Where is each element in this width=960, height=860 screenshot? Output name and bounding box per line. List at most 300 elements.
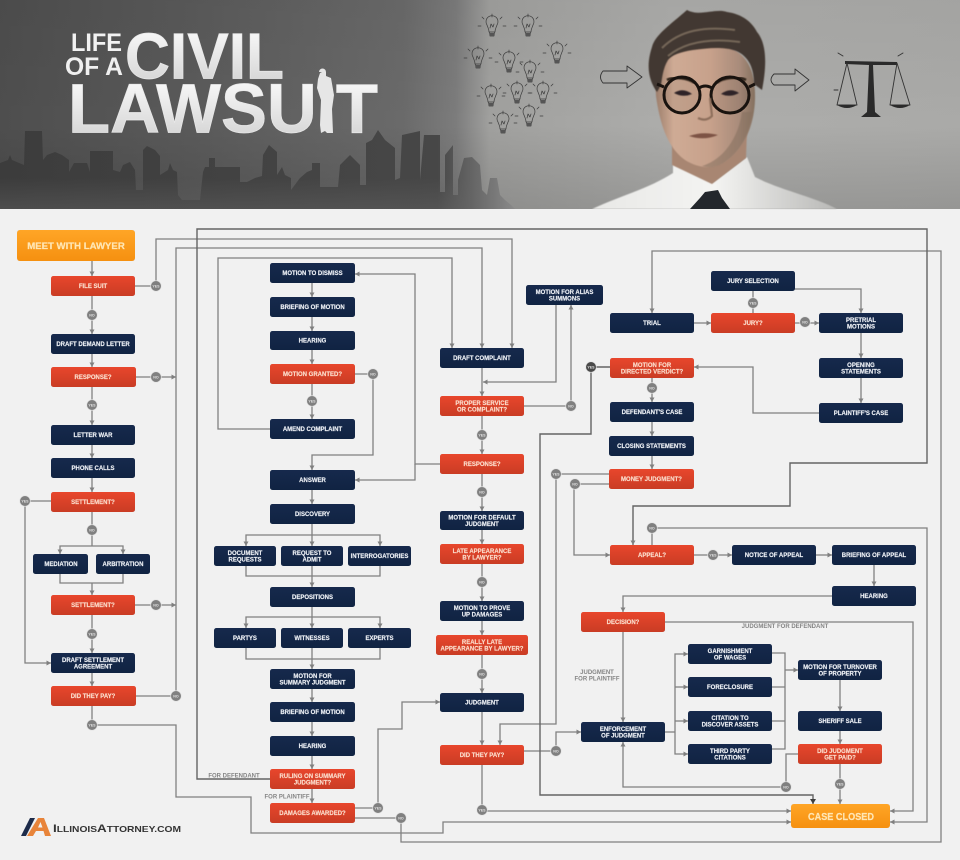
box: letter war: LETTER WAR: [74, 433, 113, 439]
box: citation to discover assets: CITATION TO: [711, 716, 749, 722]
box: damages awarded: DAMAGES AWARDED?: [279, 811, 346, 817]
arrow: appeal no to case closed: [652, 528, 927, 822]
box: did they pay: [51, 686, 136, 706]
badge: jury no: NO: [802, 320, 808, 324]
arrow: jury yes to jury selection: [752, 291, 754, 313]
box: motion for default judgment: MOTION FOR DEFAULT: [448, 515, 516, 521]
arrow: briefing to hearing: [311, 317, 313, 331]
arrow: draft demand letter to response: [91, 354, 93, 367]
box: opening statements: OPENING: [847, 363, 875, 369]
box: partys: PARTYS: [233, 636, 257, 642]
label: for plaintiff: FOR PLAINTIFF: [264, 794, 310, 800]
connectors: appeal and enforcement: [623, 528, 927, 822]
badge: damages no: [396, 813, 406, 823]
box: partys: [214, 628, 276, 648]
box: response: [51, 367, 136, 387]
box: response 2: [440, 454, 524, 474]
arrow: did judgment get paid to case closed: [839, 764, 841, 804]
badge: directed verdict yes: YES: [587, 365, 595, 369]
box: answer: ANSWER: [299, 478, 326, 484]
box: briefing of motion 2: BRIEFING OF MOTION: [280, 710, 345, 716]
icon: arrow from bulbs to man: [600, 66, 642, 88]
arrow: money judgment no to appeal: [574, 484, 610, 555]
arrow: did they pay yes to case closed: [482, 765, 791, 811]
arrow: closing to money judgment: [651, 456, 653, 469]
arrow: response to default: [481, 474, 483, 511]
box: draft demand letter: DRAFT DEMAND LETTER: [56, 342, 130, 348]
badge: directed verdict no: NO: [649, 386, 655, 390]
icons: light bulbs: [464, 14, 571, 133]
arrow: did they pay yes to case closed: [92, 725, 791, 833]
arrow: response to motion to dismiss: [355, 274, 440, 464]
box: draft demand letter: [51, 334, 135, 354]
box: citation to discover assets: DISCOVER ASSETS: [702, 722, 758, 728]
box: did they pay 2: DID THEY PAY?: [460, 753, 505, 759]
badge: directed verdict no: [647, 383, 657, 393]
badge: judgment paid yes: YES: [836, 782, 844, 786]
badge: late appearance no: [477, 577, 487, 587]
arrow: hearing to motion granted: [311, 350, 313, 364]
connector: enforcement to options trunk: [665, 731, 675, 733]
arrow: response to letter war: [91, 387, 93, 425]
badge: appeal yes: YES: [709, 553, 717, 557]
box: pretrial motions: [819, 313, 903, 333]
arrow: split to mediation: [60, 546, 92, 554]
arrow: merge to motion for summary judgment: [311, 648, 313, 669]
arrow: to foreclosure: [675, 686, 688, 688]
icon: bulb 6: [543, 41, 571, 63]
box: decision: DECISION?: [607, 620, 640, 626]
box: motion for summary judgment: [270, 669, 355, 689]
box: request to admit: [281, 546, 343, 566]
connector: discovery merge: [246, 566, 380, 576]
arrow: draft complaint to proper service: [481, 368, 483, 396]
box: hearing 3: [832, 586, 916, 606]
badge: did they pay no: NO: [173, 694, 179, 698]
badge: response 2 no: [477, 487, 487, 497]
badge: settlement 2 yes: [87, 629, 97, 639]
box: amend complaint: [270, 419, 355, 439]
badge: did they pay no: [171, 691, 181, 701]
arrow: summary judgment to briefing: [311, 689, 313, 702]
badge: settlement no: [87, 525, 97, 535]
badge: judgment paid yes: [835, 779, 845, 789]
arrow: discovery to interrogatories: [312, 535, 380, 546]
icon: bulb 2: [514, 14, 542, 36]
icon: scales of justice: [834, 53, 910, 117]
photo: man with glasses: [592, 10, 837, 209]
arrow: depositions to witnesses: [311, 607, 313, 628]
icon: arrow from man to scales: [771, 69, 809, 91]
arrow: jury selection to pretrial: [795, 289, 861, 313]
arrow: proper service no to alias summons: [524, 305, 571, 406]
box: interrogatories: [348, 546, 411, 566]
arrow: depositions to partys: [246, 617, 312, 628]
logo mark A: [27, 818, 51, 836]
labels: [208, 624, 829, 800]
box: ruling on summary judgment: [270, 769, 355, 789]
box: hearing 2: [270, 736, 355, 756]
arrow: discovery to document requests: [246, 535, 312, 546]
box: motion for alias summons: [526, 285, 603, 305]
glasses: [664, 77, 749, 113]
box: foreclosure: [688, 677, 772, 697]
box: discovery: [270, 504, 355, 524]
box: depositions: [270, 587, 355, 607]
title: Civil: CIVIL: [125, 20, 284, 92]
mouth: [689, 133, 718, 138]
badge: appeal no: [647, 523, 657, 533]
box: file suit: [51, 276, 135, 296]
title: of a: OF A: [65, 53, 123, 81]
box: motion for turnover of property: OF PROPERTY: [818, 672, 862, 678]
badges: [20, 281, 845, 823]
box: motion for default judgment: [440, 511, 524, 530]
arrow: decision to case closed: [665, 622, 913, 811]
badge: settlement yes: YES: [21, 499, 29, 503]
badge: motion granted no: [368, 369, 378, 379]
arrow: defendant's case to closing: [651, 422, 653, 436]
connector: for defendant to appeal: [197, 229, 927, 779]
box: motion to prove up damages: MOTION TO PROVE: [454, 606, 510, 612]
connector: deposition types merge: [246, 648, 380, 659]
eyes: [674, 90, 739, 96]
badge: did they pay 2 yes: YES: [478, 808, 486, 812]
arrow: merge to depositions: [311, 566, 313, 587]
box: foreclosure: FORECLOSURE: [707, 685, 753, 691]
box: motion for default judgment: JUDGMENT: [465, 522, 499, 528]
icon: bulb 9: [529, 81, 557, 103]
connectors: left column: [25, 239, 791, 833]
box: discovery: DISCOVERY: [295, 512, 330, 518]
badge: damages yes: YES: [374, 806, 382, 810]
box: notice of appeal: NOTICE OF APPEAL: [745, 553, 804, 559]
scale pan fills: [837, 105, 910, 108]
box: letter war: [51, 425, 135, 445]
header background: [0, 0, 960, 209]
box: settlement 2: SETTLEMENT?: [71, 603, 115, 609]
box: did judgment get paid: GET PAID?: [824, 756, 856, 762]
box: proper service or complaint: OR COMPLAINT?: [457, 408, 507, 414]
arrow: depositions to experts: [312, 617, 380, 628]
box: response: RESPONSE?: [74, 375, 112, 381]
arrow: response no to trunk: [136, 376, 176, 378]
glasses bridge and temples: [657, 84, 755, 88]
box: document requests: [214, 546, 276, 566]
connector: mediation and arbitration merge: [60, 574, 123, 583]
scale beam and post: [845, 61, 897, 117]
connectors: middle column: [197, 229, 941, 842]
scale pans: [834, 53, 910, 105]
label: for defendant: FOR DEFENDANT: [208, 774, 260, 780]
badge: response no: NO: [153, 375, 159, 379]
box: plaintiff's case: PLAINTIFF'S CASE: [834, 411, 888, 417]
arrow: sheriff sale to did judgment get paid: [839, 731, 841, 744]
box: hearing: HEARING: [299, 339, 327, 345]
badge: money judgment no: NO: [572, 482, 578, 486]
box: document requests: REQUESTS: [228, 558, 262, 564]
arrow: opening to plaintiff: [860, 378, 862, 403]
arrow: proper service to response: [481, 416, 483, 454]
eyebrows: [667, 78, 746, 83]
arrow: default to late appearance: [481, 530, 483, 544]
box: hearing 2: HEARING: [299, 744, 327, 750]
box: motion granted: MOTION GRANTED?: [283, 372, 342, 378]
connector: options merge: [772, 653, 785, 749]
box: did judgment get paid: [798, 744, 882, 764]
badge: response no: [151, 372, 161, 382]
box: defendant's case: DEFENDANT'S CASE: [622, 410, 682, 416]
box: response 2: RESPONSE?: [463, 462, 501, 468]
arrow: directed verdict to defendant's case: [651, 378, 653, 402]
badge: damages yes: [373, 803, 383, 813]
box: enforcement of judgment: ENFORCEMENT: [600, 727, 646, 733]
badge: settlement no: NO: [89, 528, 95, 532]
icon: bulb 3: [464, 46, 492, 68]
box: motion for turnover of property: MOTION FOR TURNOVER: [803, 665, 877, 671]
box: plaintiff's case: [819, 403, 903, 423]
box: mediation: [33, 554, 88, 574]
connectors: trial column: [540, 289, 861, 804]
connector: did they pay no: [136, 695, 176, 697]
box: briefing of motion: BRIEFING OF MOTION: [280, 305, 345, 311]
arrow: turnover to sheriff sale: [839, 680, 841, 711]
icon: bulb 5: [516, 60, 544, 82]
box: motion for directed verdict: MOTION FOR: [633, 363, 672, 369]
arrow: did they pay no to enforcement: [524, 732, 581, 751]
badge: late appearance no: NO: [479, 580, 485, 584]
badge: file suit no: NO: [89, 313, 95, 317]
badge: directed verdict yes: [586, 362, 596, 372]
header shading: [0, 0, 960, 209]
box: did they pay: DID THEY PAY?: [71, 694, 116, 700]
hair highlights: [662, 29, 740, 56]
box: draft settlement agreement: [51, 653, 135, 673]
connector: no line to draft complaint: [176, 248, 482, 696]
arrow: motion to dismiss to briefing: [311, 283, 313, 297]
box: third party citations: [688, 744, 772, 764]
box: document requests: DOCUMENT: [228, 551, 263, 557]
badge: file suit no: [87, 310, 97, 320]
box: garnishment of wages: OF WAGES: [714, 656, 746, 662]
badge: appeal no: NO: [649, 526, 655, 530]
connector: file suit yes to draft complaint: [135, 239, 512, 348]
arrow: did judgment no to enforcement: [623, 742, 798, 787]
box: draft settlement agreement: AGREEMENT: [74, 664, 112, 670]
badge: settlement 2 yes: YES: [88, 632, 96, 636]
arrow: prove up to really late: [481, 621, 483, 635]
box: damages awarded: [270, 803, 355, 823]
arrow: motion granted no to answer: [312, 374, 373, 470]
box: hearing: [270, 331, 355, 350]
box: pretrial motions: PRETRIAL: [846, 318, 876, 324]
box: answer: [270, 470, 355, 490]
box: briefing of appeal: BRIEFING OF APPEAL: [842, 553, 907, 559]
arrow: briefing of appeal to hearing: [873, 565, 875, 586]
badge: proper service no: [566, 401, 576, 411]
badge: jury yes: YES: [749, 301, 757, 305]
box: appeal: APPEAL?: [638, 553, 666, 559]
box: trial: TRIAL: [643, 321, 661, 327]
badge: file suit yes: [151, 281, 161, 291]
icon: bulb 4: [495, 50, 523, 72]
badge: appeal yes: [708, 550, 718, 560]
box: motion to prove up damages: [440, 601, 524, 621]
box: jury: JURY?: [743, 321, 763, 327]
arrow: ruling to damages: [311, 789, 313, 803]
box: draft complaint: [440, 348, 524, 368]
icon: bulb 1: [478, 14, 506, 36]
box: settlement: [51, 492, 135, 512]
box: citation to discover assets: [688, 711, 772, 731]
badge: response yes: YES: [88, 403, 96, 407]
arrow: letter war to phone calls: [91, 445, 93, 458]
badge: proper service no: NO: [568, 404, 574, 408]
arrow: settlement no to trunk: [135, 604, 176, 606]
badge: proper service yes: YES: [478, 433, 486, 437]
box: money judgment: MONEY JUDGMENT?: [621, 477, 682, 483]
badge: did they pay yes: [87, 720, 97, 730]
box: briefing of appeal: [832, 545, 916, 565]
box: opening statements: STATEMENTS: [841, 370, 881, 376]
badge: money judgment yes: YES: [552, 472, 560, 476]
box: sheriff sale: SHERIFF SALE: [818, 719, 862, 725]
badge: file suit yes: YES: [152, 284, 160, 288]
title: Lawsuit: LAWSUIT: [68, 70, 378, 148]
neck: [672, 130, 747, 184]
box: did judgment get paid: DID JUDGMENT: [817, 749, 863, 755]
box: garnishment of wages: GARNISHMENT: [708, 649, 753, 655]
box: ruling on summary judgment: JUDGMENT?: [294, 780, 331, 786]
arrow: really late to judgment: [481, 655, 483, 693]
box: proper service or complaint: [440, 396, 524, 416]
badge: did they pay 2 no: NO: [553, 749, 559, 753]
arrow: pretrial to opening: [860, 333, 862, 358]
box: enforcement of judgment: OF JUDGMENT: [601, 734, 645, 740]
box: closing statements: CLOSING STATEMENTS: [617, 444, 686, 450]
arrow: split to arbitration: [92, 546, 123, 554]
arrow: appeal yes to notice: [694, 554, 732, 556]
box: ruling on summary judgment: RULING ON SUMMARY: [279, 774, 346, 780]
arrow: directed verdict yes to case closed: [540, 367, 813, 804]
box: late appearance: LATE APPEARANCE: [453, 549, 511, 555]
box: really late appearance: REALLY LATE: [462, 640, 502, 646]
box: defendant's case: [610, 402, 694, 422]
box: phone calls: PHONE CALLS: [71, 466, 115, 472]
box: proper service or complaint: PROPER SERVICE: [455, 401, 509, 407]
arrow: phone calls to settlement: [91, 478, 93, 492]
connectors: third column: [482, 305, 791, 811]
badge: judgment paid no: NO: [783, 785, 789, 789]
box: phone calls: [51, 458, 135, 478]
tie: [690, 190, 730, 209]
arrow: answer to discovery: [311, 490, 313, 504]
box: did they pay 2: [440, 745, 524, 765]
box: decision: [581, 612, 665, 632]
badge: jury yes: [748, 298, 758, 308]
box: motion for directed verdict: [610, 358, 694, 378]
arrow: agreement to did they pay: [91, 673, 93, 686]
icon: man silhouette: [317, 69, 334, 133]
box: enforcement of judgment: [581, 722, 665, 742]
box: depositions: DEPOSITIONS: [292, 595, 333, 601]
box: money judgment: [609, 469, 694, 489]
arrow: motion granted to amend complaint: [311, 384, 313, 419]
box: arbitration: [96, 554, 150, 574]
arrow: to citation: [675, 720, 688, 722]
box: opening statements: [819, 358, 903, 378]
arrow: late appearance to prove up: [481, 564, 483, 601]
badge: really late no: [477, 669, 487, 679]
logo: IllinoisAttorney.com: [21, 818, 181, 836]
arrow: jury no to pretrial: [795, 322, 819, 324]
connector: did they pay to yes: [91, 706, 93, 725]
logo mark slash: [21, 818, 35, 836]
connector: discovery down: [311, 524, 313, 546]
box: experts: EXPERTS: [365, 636, 394, 642]
city skyline: [0, 130, 515, 209]
box: case closed: CASE CLOSED: [808, 811, 874, 823]
badge: money judgment yes: [551, 469, 561, 479]
arrow: judgment to did they pay: [481, 712, 483, 745]
arrow: meet with lawyer to file suit: [91, 261, 93, 276]
box: interrogatories: INTERROGATORIES: [351, 554, 408, 560]
box: trial: [610, 313, 694, 333]
box: third party citations: THIRD PARTY: [710, 749, 750, 755]
badge: proper service yes: [477, 430, 487, 440]
box: motion to dismiss: [270, 263, 355, 283]
arrow: alias summons to proper service line: [483, 305, 556, 382]
arrow: to garnishment: [675, 654, 688, 732]
box: motion to dismiss: MOTION TO DISMISS: [282, 271, 343, 277]
badge: settlement 2 no: NO: [153, 603, 159, 607]
box: late appearance: BY LAWYER?: [462, 556, 502, 562]
arrow: hearing to decision: [623, 596, 832, 612]
box: file suit: FILE SUIT: [79, 284, 107, 290]
box: motion to prove up damages: UP DAMAGES: [462, 612, 502, 618]
arrow: decision to enforcement: [622, 632, 624, 722]
arrow: response to answer: [355, 464, 415, 480]
box: motion for summary judgment: SUMMARY JUDGMENT: [279, 680, 346, 686]
arrow: amend complaint to draft complaint: [218, 258, 452, 429]
box: meet with lawyer: [17, 230, 135, 261]
badge: did they pay 2 yes: [477, 805, 487, 815]
badge: judgment paid no: [781, 782, 791, 792]
face: [656, 43, 755, 167]
title: Life: LIFE: [71, 29, 122, 57]
box: settlement 2: [51, 595, 135, 615]
box: jury selection: JURY SELECTION: [727, 279, 779, 285]
logo text: ILLINOIS ATTORNEY .COM: [53, 823, 181, 835]
box: briefing of motion 2: [270, 702, 355, 722]
box: jury selection: [711, 271, 795, 291]
box: motion for turnover of property: [798, 660, 882, 680]
badge: motion granted no: NO: [370, 372, 376, 376]
badge: did they pay yes: YES: [88, 723, 96, 727]
box: closing statements: [609, 436, 694, 456]
box: briefing of motion: [270, 297, 355, 317]
box: judgment: JUDGMENT: [465, 701, 499, 707]
icon: bulb 11: [489, 111, 517, 133]
jaw shadow: [702, 112, 752, 167]
box: motion for alias summons: SUMMONS: [549, 296, 580, 302]
badge: damages no: NO: [398, 816, 404, 820]
arrow: settlement yes to agreement: [25, 501, 51, 663]
box: witnesses: WITNESSES: [294, 636, 330, 642]
box: motion for directed verdict: DIRECTED VERDICT?: [621, 370, 683, 376]
box: late appearance: [440, 544, 524, 564]
arrow: to third party: [675, 732, 688, 754]
